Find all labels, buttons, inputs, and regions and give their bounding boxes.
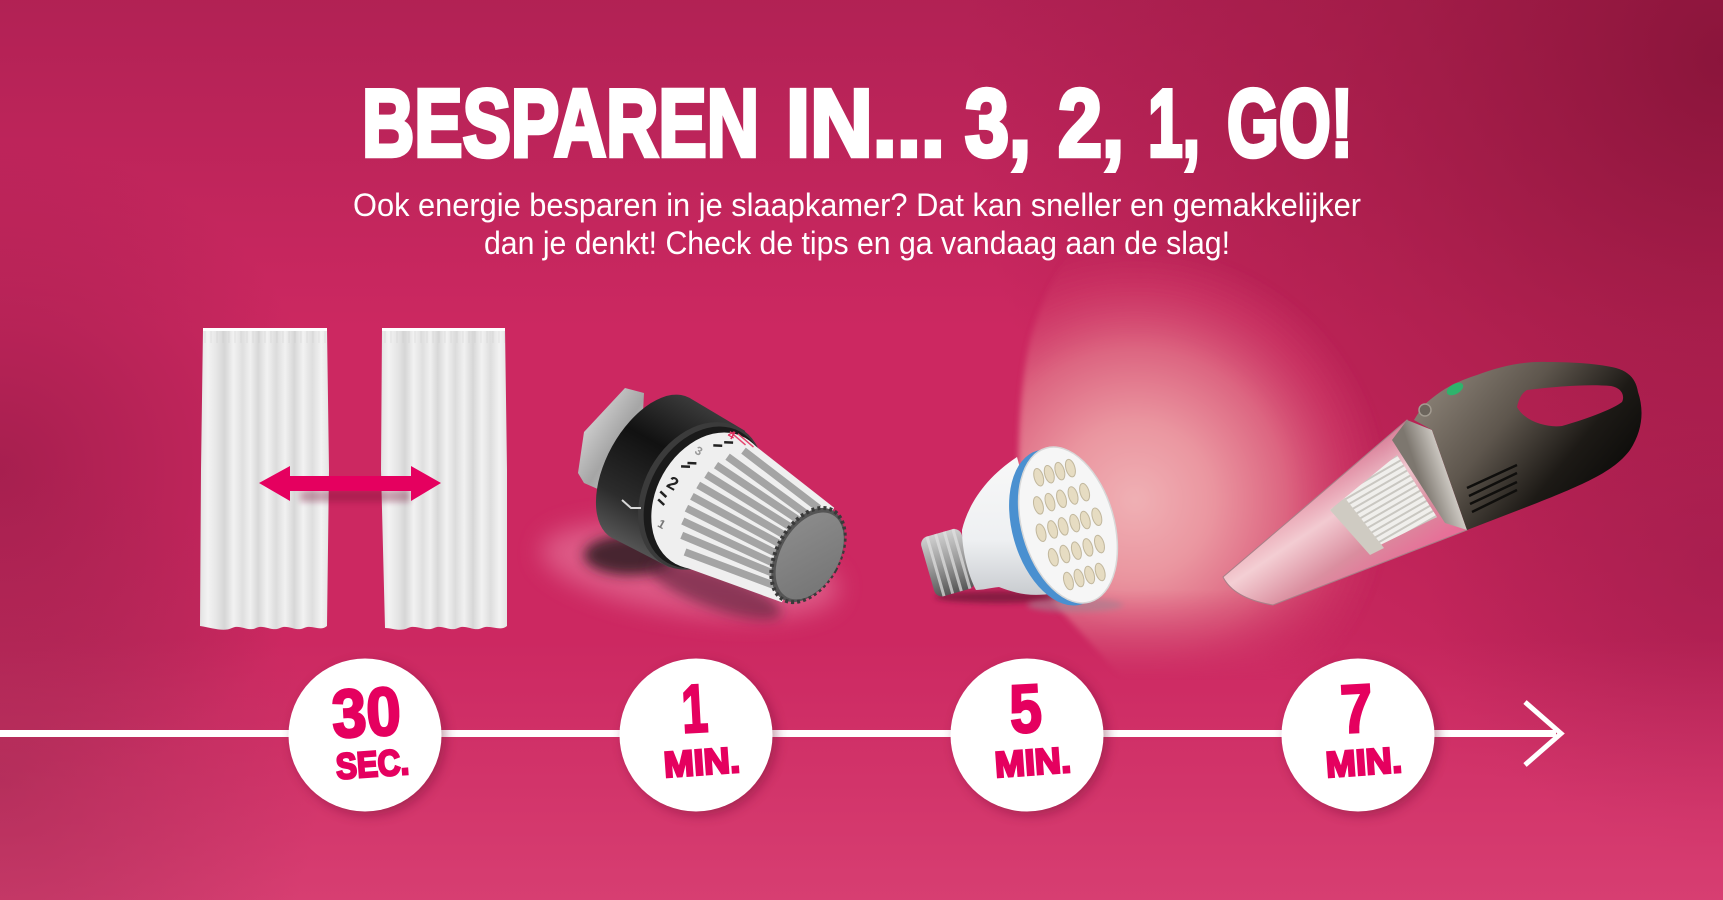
- scale numerals: 4: [725, 427, 738, 443]
- power button: [1445, 380, 1465, 398]
- subtitle: Ook energie besparen in je slaapkamer? Dat kan sneller en gemakkelijker: [353, 187, 1361, 223]
- light glow: [1015, 269, 1362, 664]
- timeline: [0, 702, 1561, 765]
- scale ticks: [655, 423, 733, 520]
- white scale band: [628, 412, 792, 590]
- icon: LED bulb: [919, 435, 1134, 617]
- icon: handheld vacuum: [1223, 362, 1642, 605]
- knob body: 2: [664, 472, 682, 495]
- knob body: 3: [692, 443, 705, 459]
- title: 3,: [965, 70, 1031, 177]
- silver end: [578, 388, 644, 490]
- bulb housing: [962, 457, 1054, 595]
- marker: 30 sec: [288, 658, 445, 815]
- timeline line: [0, 730, 1556, 737]
- left curtain: [200, 328, 329, 630]
- black collar: [573, 376, 746, 569]
- title: [362, 70, 1353, 177]
- icon: curtains with arrow: [200, 328, 507, 630]
- marker: 7 min: MIN.: [1324, 739, 1403, 785]
- LED grid: [1019, 455, 1119, 595]
- knob body: [573, 376, 874, 640]
- arrow shadow: [300, 490, 410, 502]
- front face: [1002, 435, 1134, 615]
- marker: 7 min: 7: [1339, 670, 1375, 748]
- double arrow: [259, 466, 441, 501]
- marker: 1 min: [620, 658, 776, 815]
- curtain gathers: [203, 331, 505, 343]
- marker: 7 min: [1282, 658, 1438, 815]
- arrow head: [1525, 702, 1561, 765]
- title: IN...: [786, 70, 945, 177]
- marker: 5 min: 5: [1008, 670, 1044, 748]
- curtain rail highlight: [203, 328, 505, 331]
- filter cartridge: [1330, 455, 1437, 550]
- marker: 1 min: 1: [680, 670, 710, 748]
- marker: 5 min: [950, 658, 1107, 815]
- floor glow: [535, 506, 845, 634]
- marker: 5 min: MIN.: [993, 739, 1072, 785]
- blue band: [992, 438, 1127, 617]
- icon: thermostat knob: [535, 376, 874, 640]
- right curtain: [381, 328, 507, 630]
- small knob: [1419, 404, 1431, 416]
- title: 1,: [1148, 70, 1200, 177]
- knob body: 1: [655, 516, 668, 532]
- body and handle: [1414, 362, 1642, 530]
- marker: 1 min: MIN.: [662, 739, 741, 785]
- metal ring: [1392, 420, 1467, 530]
- marker: 30 sec: 30: [330, 673, 403, 753]
- title: 2,: [1058, 70, 1124, 177]
- subtitle: dan je denkt! Check de tips en ga vandaag aan de slag!: [484, 225, 1230, 261]
- subtitle: [353, 187, 1361, 261]
- transparent dust tube: [1223, 420, 1467, 605]
- ribs: [667, 439, 826, 599]
- indicator mark: [622, 500, 641, 508]
- title: BESPAREN: [362, 70, 759, 177]
- vents: [1467, 465, 1517, 512]
- marker: 30 sec: SEC.: [335, 741, 410, 787]
- end cap: [756, 495, 860, 615]
- shadow: [935, 591, 1065, 603]
- cone: [675, 438, 843, 618]
- floor shadow: [584, 535, 676, 575]
- title: GO!: [1227, 70, 1353, 177]
- screw base: [919, 527, 977, 598]
